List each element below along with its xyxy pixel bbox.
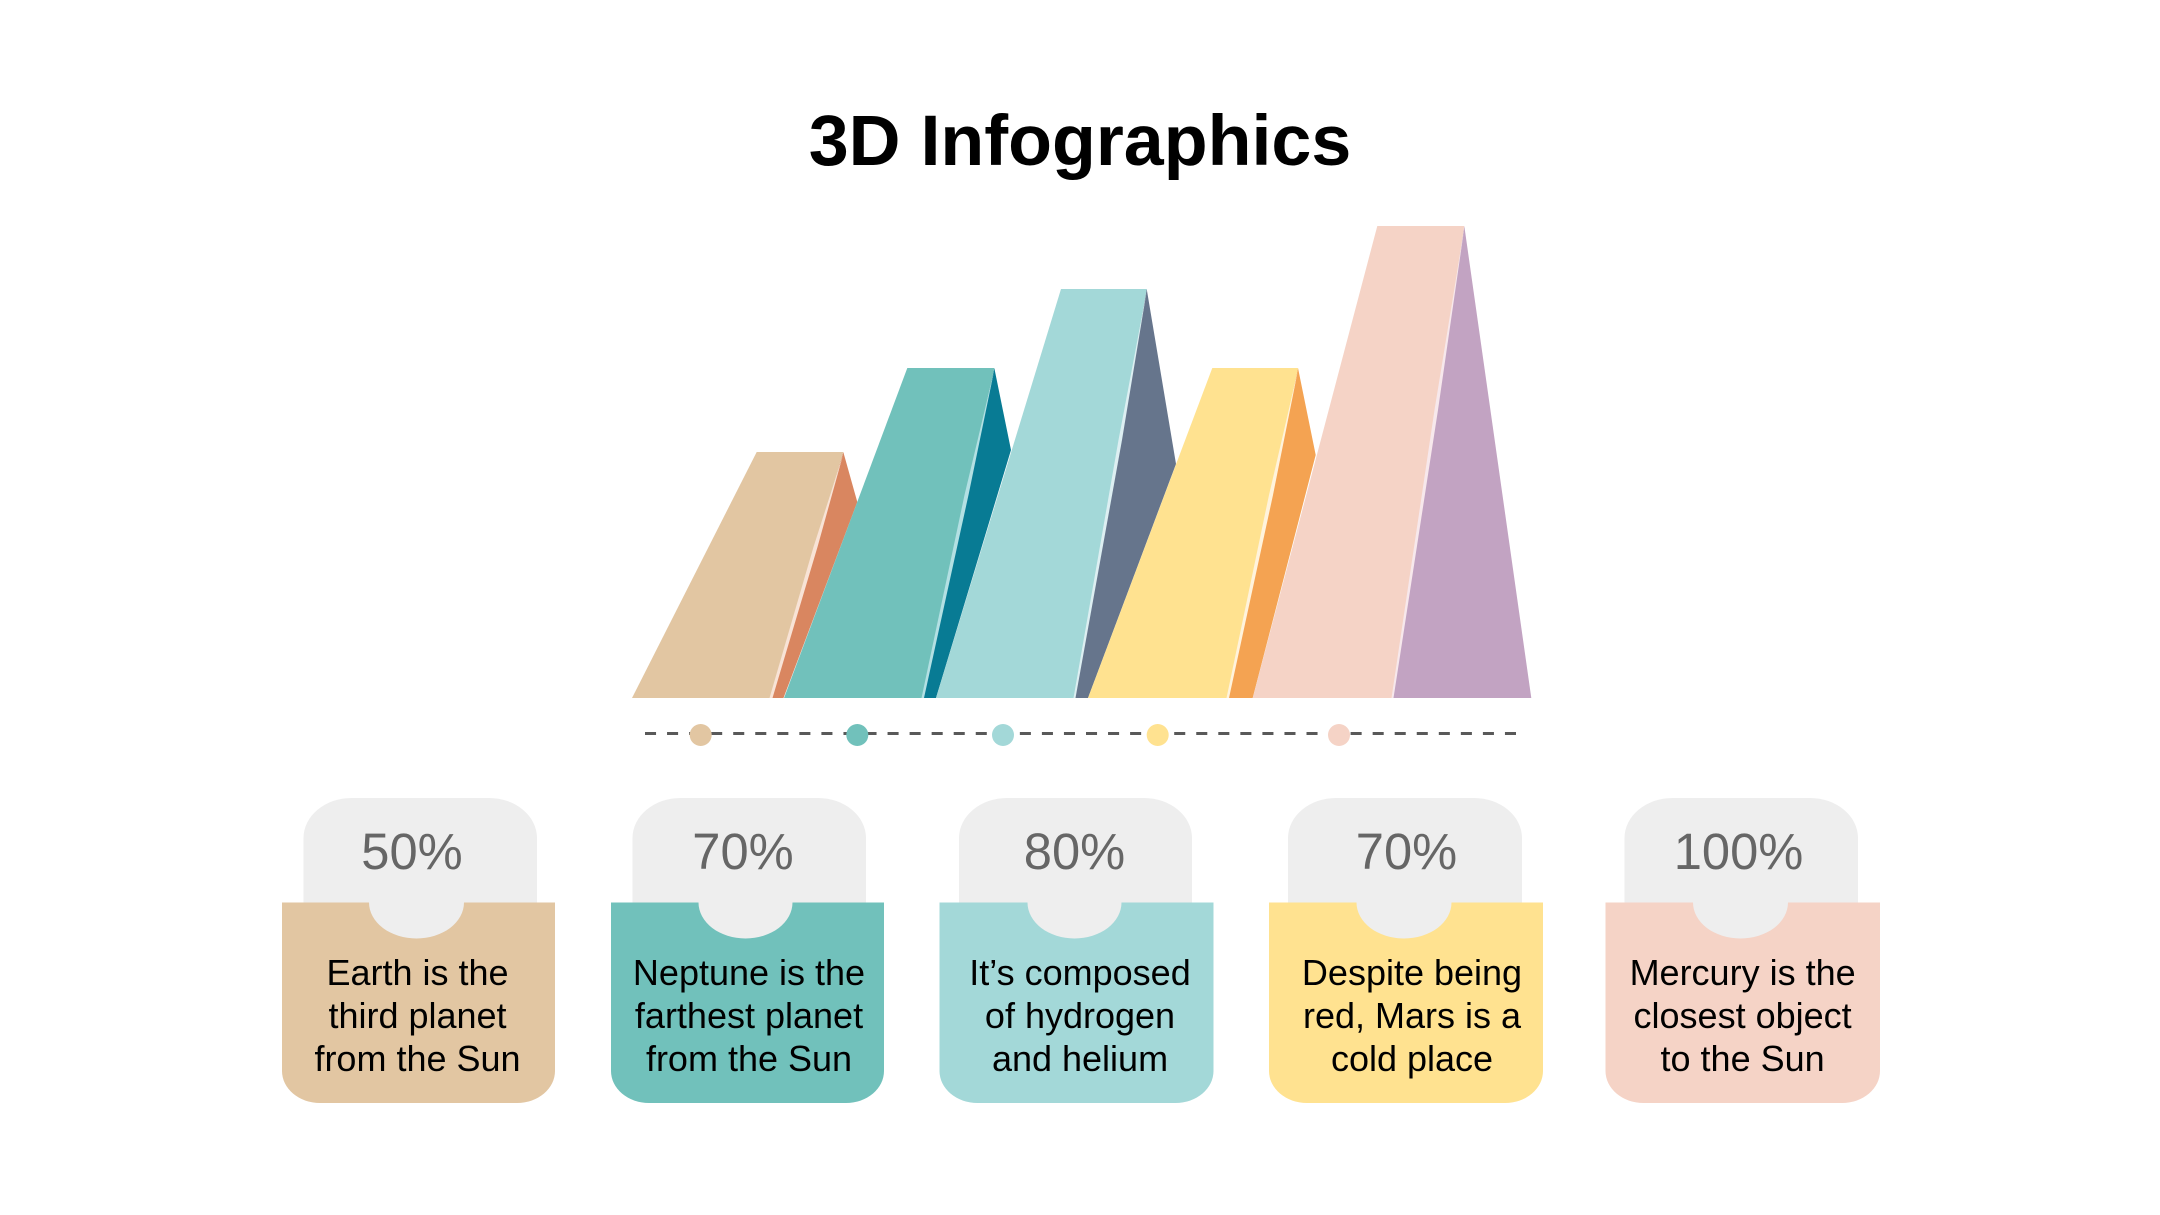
title: 3D Infographics	[809, 101, 1351, 181]
card: Mercury 100%: Mercury is the	[1630, 952, 1856, 993]
card: Earth 50%: 50%	[361, 823, 463, 880]
card: hydrogen 80%	[940, 798, 1214, 1103]
card: Neptune 70%: farthest planet	[635, 995, 863, 1036]
card: Mercury 100%: to the Sun	[1661, 1038, 1825, 1079]
card: Earth 50%: Earth is the	[326, 952, 509, 993]
card: Neptune 70%: Neptune is the	[633, 952, 865, 993]
card: Mars 70%: cold place	[1331, 1038, 1493, 1079]
card: Earth 50%: from the Sun	[314, 1038, 521, 1079]
bar: 70% teal	[784, 368, 1011, 698]
card: Neptune 70%: from the Sun	[646, 1038, 852, 1079]
bar: 100% pink	[1253, 226, 1531, 698]
card: Mars 70%: Despite being	[1302, 952, 1522, 993]
card: Neptune 70%: 70%	[692, 823, 794, 880]
card: Mars 70%: 70%	[1356, 823, 1457, 880]
card: Neptune 70%	[611, 798, 884, 1103]
chart: 3D bars	[632, 226, 1531, 698]
card: Mercury 100%: closest object	[1634, 995, 1852, 1036]
card: hydrogen 80%: and helium	[992, 1038, 1168, 1079]
card: Earth 50%	[282, 798, 555, 1103]
bar: 50% tan	[632, 452, 857, 698]
card: hydrogen 80%: It’s composed	[969, 952, 1191, 993]
card: Mercury 100%: 100%	[1674, 823, 1803, 880]
card: Mars 70%: red, Mars is a	[1303, 995, 1522, 1036]
timeline: dashed line with dots	[645, 724, 1516, 746]
card: Mercury 100%	[1606, 798, 1880, 1103]
card: Earth 50%: third planet	[328, 995, 507, 1036]
bar: 80% light teal	[936, 289, 1176, 698]
card: hydrogen 80%: of hydrogen	[985, 995, 1175, 1036]
card: Mars 70%	[1269, 798, 1543, 1103]
bar: 70% yellow	[1088, 368, 1316, 698]
card: hydrogen 80%: 80%	[1024, 823, 1125, 880]
